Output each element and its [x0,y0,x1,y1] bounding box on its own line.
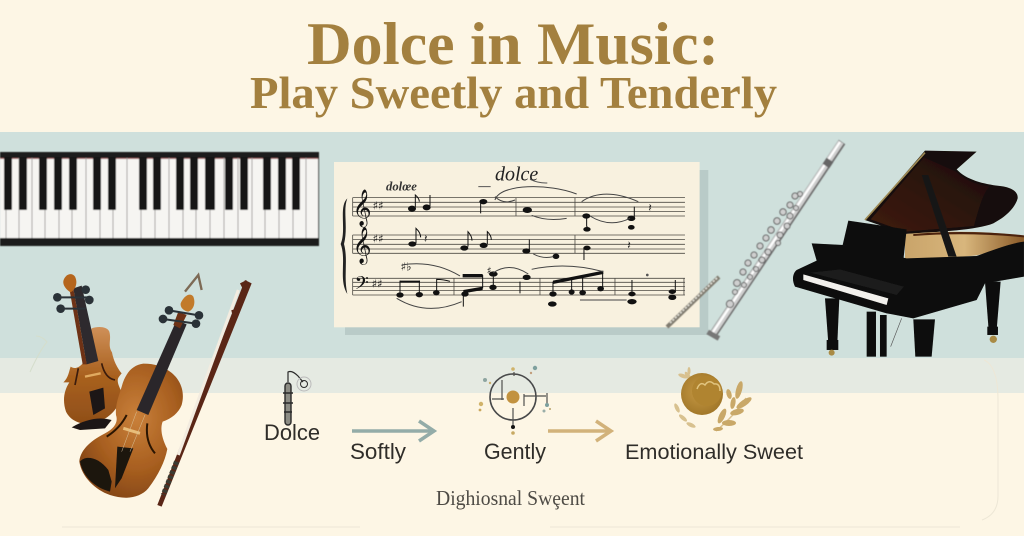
caption: Dighiosnal Swȩent [436,486,585,510]
label: Softly: Softly [350,439,406,464]
clefs: 𝄢 [355,274,369,299]
lid prop [922,175,957,257]
rests and dots: 𝄽 [648,201,652,215]
title: Dolce in Music: [307,11,719,77]
label: Emotionally Sweet: Emotionally Sweet [625,440,803,464]
piano keys [803,274,888,305]
back violin [53,274,122,430]
front violin [79,295,203,498]
small flute piece [667,277,719,327]
clefs: 𝄞 [353,225,372,264]
staff lines [353,198,685,295]
clefs: ♯♯ [373,232,384,246]
piano lid [865,151,1018,234]
dolce markings: dolce [495,164,538,186]
clefs [353,188,491,299]
sheet paper [334,162,700,327]
icon: gold medallion with laurel [673,367,753,431]
piano legs [825,282,1001,357]
clefs: ♯♯ [372,276,383,290]
sheet music: 𝄽 [424,232,427,246]
brace [341,198,347,294]
icon: microphone [283,372,311,425]
bow [157,280,252,507]
title [250,11,777,118]
grand piano [793,151,1024,357]
dolce markings: dolœe [386,180,417,194]
dolce markings [386,164,538,194]
stems and beams [400,195,675,307]
background: teal band [0,132,1024,358]
label: Gently: Gently [484,439,546,464]
clefs: ♯♯ [373,198,384,212]
icon: circle emblem [479,366,551,435]
label: Dolce: Dolce [264,420,320,445]
music desk [843,221,907,261]
background: pale transition band [0,358,1024,393]
piano interior [905,232,1024,259]
small tuning clip [185,275,202,292]
faint vine decoration [30,336,47,372]
arrow: to softly [352,421,434,441]
slurs [397,187,638,308]
title: Play Sweetly and Tenderly [250,67,777,118]
clefs: ♯ [487,266,491,277]
sheet music: 𝄽 [627,238,631,252]
piano keyboard [0,152,319,246]
arrow: to emotionally sweet [548,421,611,441]
piano case [793,242,1024,318]
clefs: 𝄞 [353,188,372,227]
sheet shadow [345,170,708,335]
notes [396,199,676,307]
violins and bow [53,274,252,507]
sheet music [334,162,708,335]
clefs: ♯♭ [401,260,411,274]
flute [706,142,842,341]
